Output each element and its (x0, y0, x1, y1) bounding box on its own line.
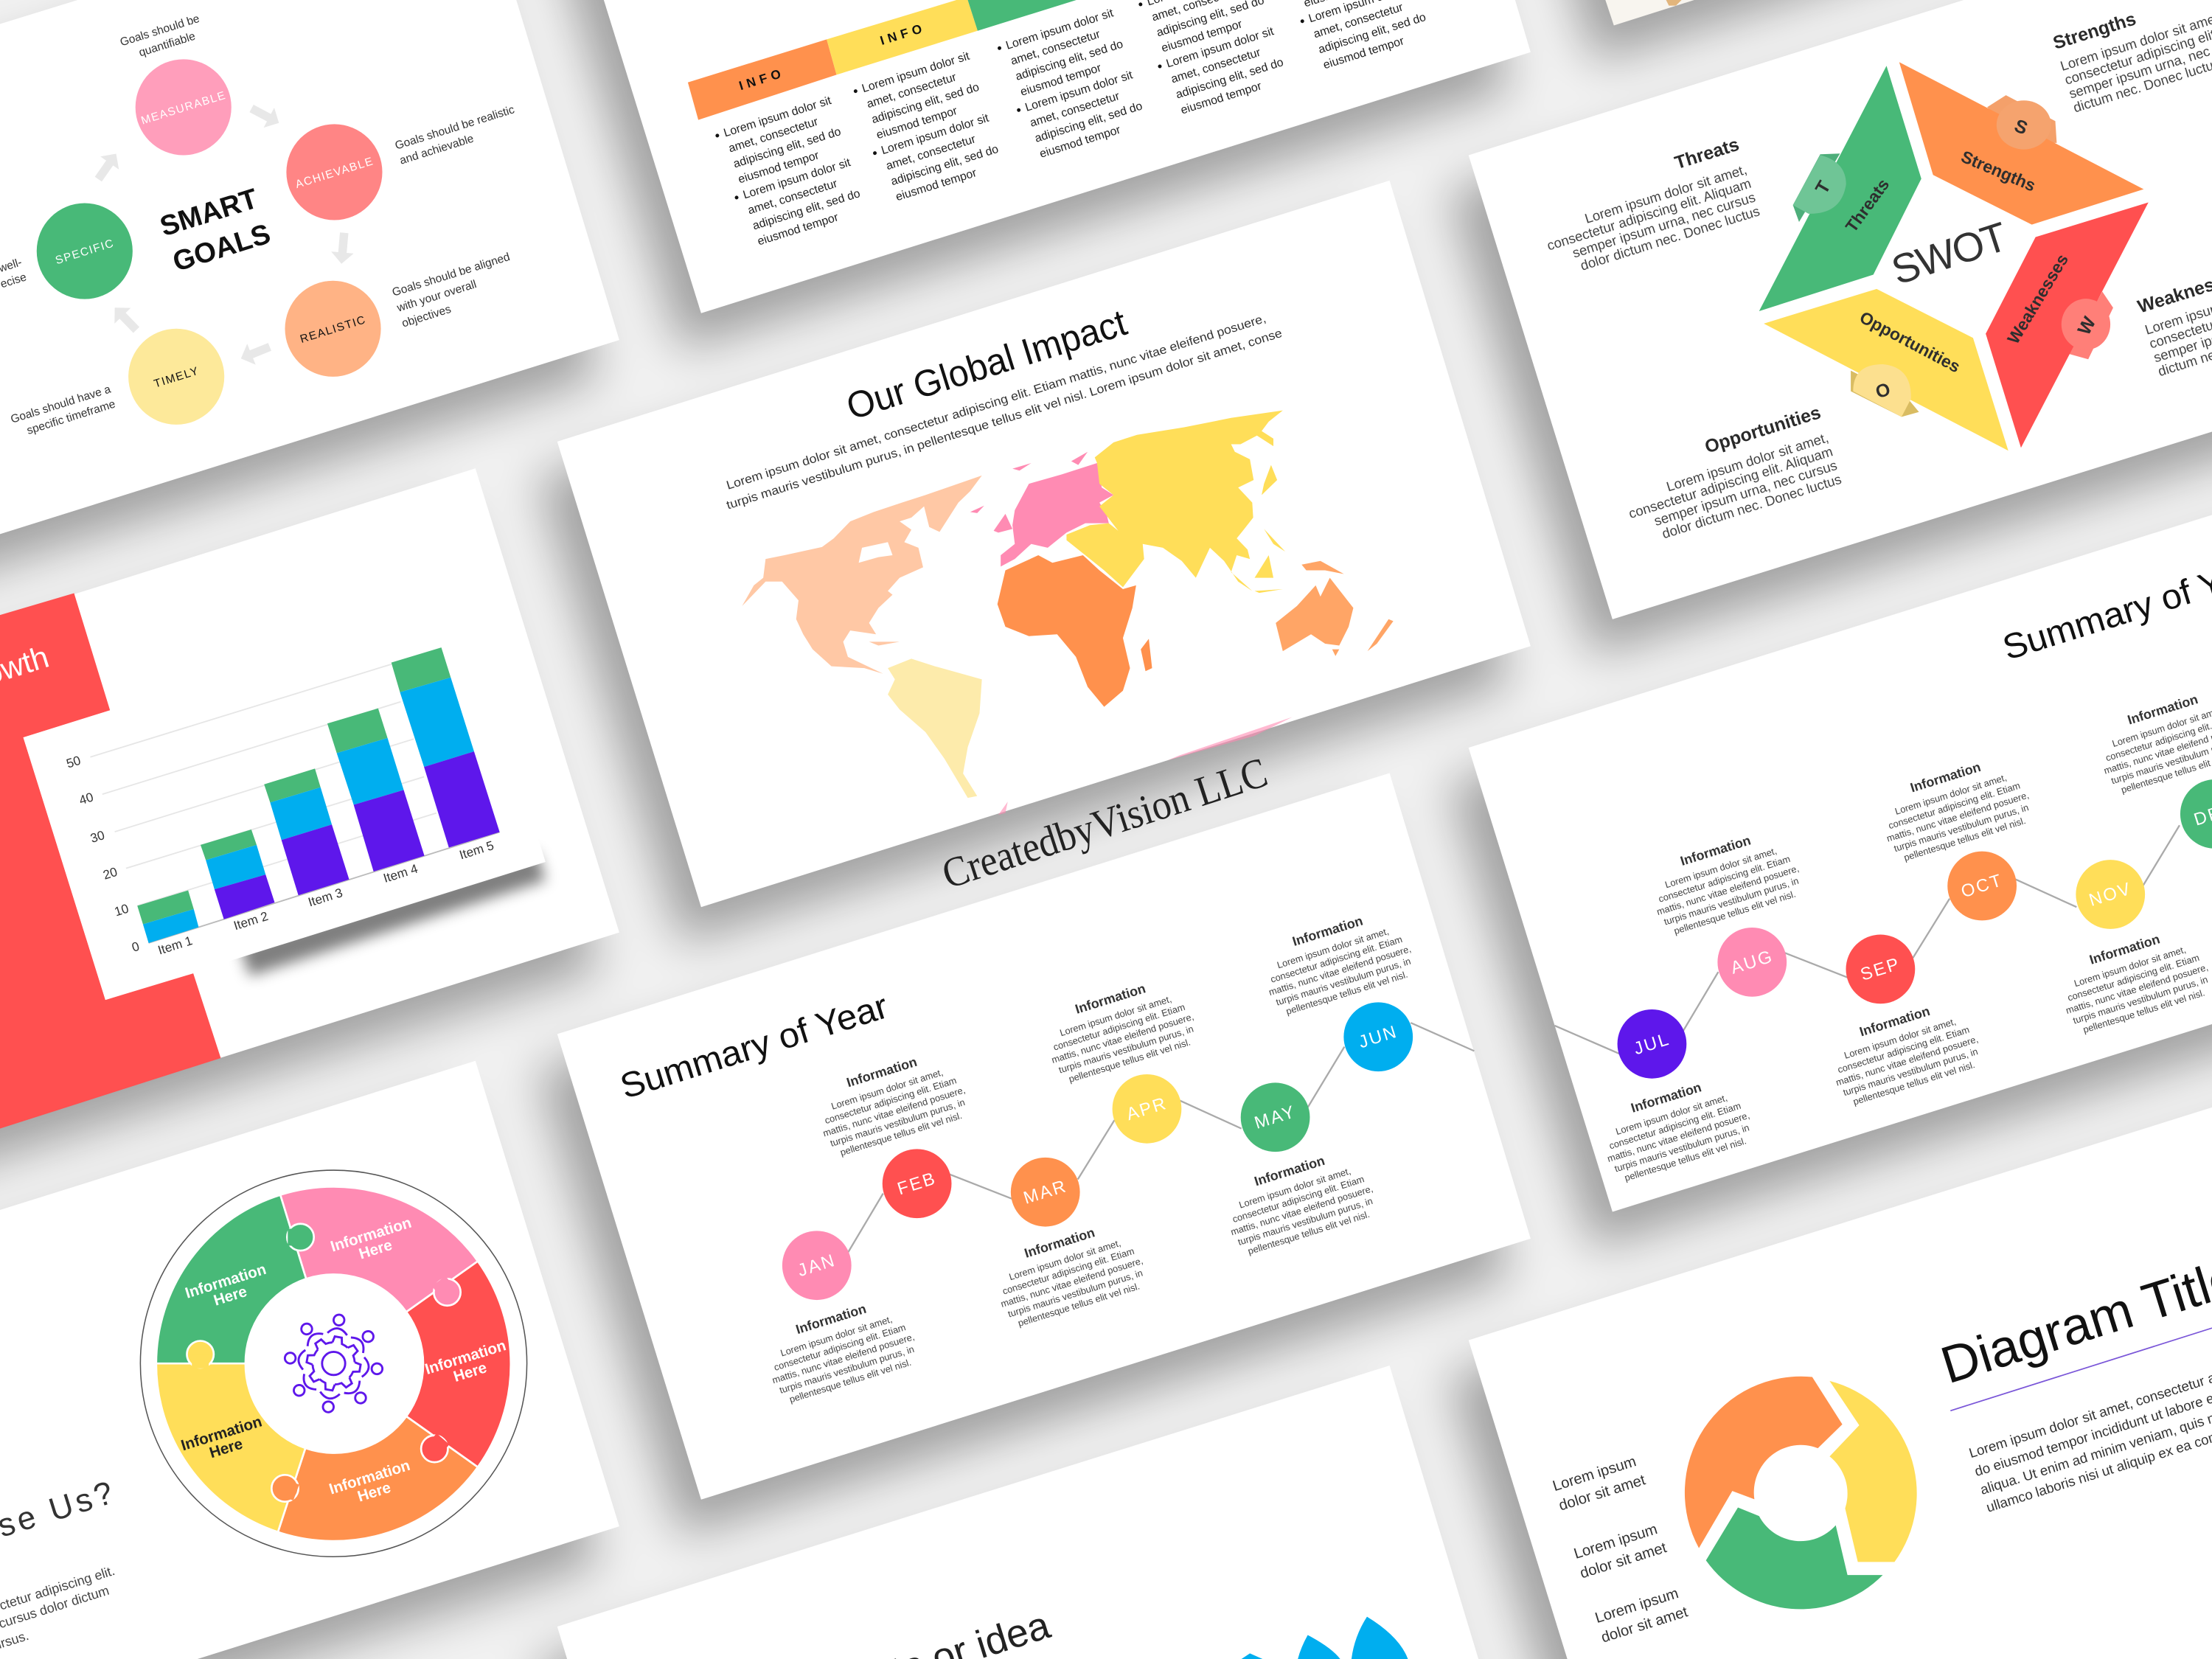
text: AUG info (1643, 821, 1807, 939)
text: MAY info: turpis mauris vestibulum purus, in (1237, 1195, 1374, 1248)
label: green segment: Information (183, 1261, 268, 1302)
axis labels: Item 1 (156, 933, 194, 958)
text: threats: Lorem ipsum dolor sit amet, (1583, 161, 1748, 226)
text: measurable note: quantifiable (137, 30, 197, 59)
node: AUG: AUG (1728, 946, 1776, 978)
label: yellow segment: Here (207, 1436, 245, 1461)
list column 3: eiusmod tempor (1038, 124, 1122, 161)
text: JUN info (1254, 902, 1419, 1020)
list column 2: adipiscing elit, sed do (870, 81, 981, 126)
segment labels (1812, 115, 2100, 403)
list column 2: eiusmod tempor (875, 105, 959, 142)
text: opportunities: semper ipsum urna, nec cursus (1652, 457, 1839, 529)
antarctica sliver (998, 717, 1293, 815)
label: red segment (423, 1337, 512, 1393)
text: cycle label 1: dolor sit amet (1557, 1472, 1648, 1514)
text: APR info: pellentesque tellus elit vel nisl. (1068, 1036, 1192, 1085)
list column 3: adipiscing elit, sed do (1033, 100, 1144, 145)
text: NOV info: turpis mauris vestibulum purus, in (2072, 974, 2209, 1026)
arrow: timely to specific (107, 300, 145, 338)
list column 2: amet, consectetur (885, 133, 978, 173)
text: JAN info: pellentesque tellus elit vel nisl. (788, 1357, 913, 1405)
SWOT diagram (1759, 62, 2149, 451)
node: JUN (1343, 1002, 1413, 1071)
text: realistic note: objectives (400, 303, 453, 330)
strengths segment (1899, 62, 2143, 225)
asia (1066, 411, 1285, 593)
text: OCT info: turpis mauris vestibulum purus, in (1893, 801, 2030, 854)
list column 5: eiusmod tempor (1322, 35, 1406, 72)
text: DEC info: Information (2126, 692, 2199, 728)
node: SEP (1846, 935, 1915, 1004)
text: threats (1532, 134, 1761, 281)
text: timely note: Goals should have a (9, 383, 113, 426)
text: JAN info: consectetur adipiscing elit. Etiam (773, 1321, 907, 1373)
list column 1: Lorem ipsum dolor sit (723, 94, 833, 139)
timeline connector (1554, 825, 2180, 1054)
text: NOV info: Information (2087, 931, 2162, 967)
list column 5: amet, consectetur (1312, 1, 1405, 41)
text: OCT info (1872, 748, 2037, 866)
text: strengths (2051, 0, 2212, 115)
text: JAN info: Information (794, 1301, 868, 1337)
text: measurable note: Goals should be (119, 13, 201, 49)
text: createdbyvision watermark: CreatedbyVision LLC (936, 749, 1273, 898)
axis labels: 30 (88, 827, 106, 846)
arrow: specific to measurable (89, 147, 125, 186)
list column 4: adipiscing elit, sed do (1175, 56, 1285, 102)
list column 2: adipiscing elit, sed do (889, 143, 1000, 188)
text: strengths: Strengths (2051, 8, 2138, 54)
label: red segment: Information (423, 1337, 508, 1378)
title: SMART goals (156, 182, 274, 279)
list column 3: Lorem ipsum dolor sit (1004, 7, 1116, 52)
puzzle ring diagram (140, 1170, 527, 1557)
text: MAR info (987, 1214, 1151, 1332)
node: APR: APR (1124, 1093, 1170, 1124)
threats segment (1759, 66, 1921, 311)
panel: summary of year slide (557, 773, 1531, 1500)
arrow: achievable to realistic (330, 232, 355, 265)
panel: diagram title slide (1469, 1107, 2212, 1659)
panel: why choose us slide (0, 1061, 619, 1659)
list column 2 (852, 50, 1005, 206)
node: JAN: JAN (796, 1251, 838, 1281)
text: SEP info: consectetur adipiscing elit. Etiam (1836, 1023, 1971, 1075)
text: SEP info: pellentesque tellus elit vel nisl. (1851, 1059, 1976, 1107)
table headers: INFO (878, 20, 928, 48)
text: map intro: Lorem ipsum dolor sit amet, consectetur adipiscing elit. Etiam mattis, nunc vitae eleifend posuere, (725, 312, 1267, 493)
title: our global impact: Our Global Impact (841, 301, 1132, 428)
text: MAR info: Information (1023, 1225, 1096, 1261)
list column 1: eiusmod tempor (756, 211, 841, 248)
icon: people around gear (284, 1313, 383, 1413)
text: OCT info: pellentesque tellus elit vel nisl. (1902, 815, 2027, 863)
text: cycle label 1 (1551, 1453, 1648, 1514)
text: JUL info: consectetur adipiscing elit. Etiam (1607, 1100, 1742, 1152)
node: JUN: JUN (1357, 1021, 1400, 1052)
timeline connector (848, 1023, 1474, 1253)
panel: global impact map slide (557, 181, 1531, 907)
text: SEP info: Lorem ipsum dolor sit amet, (1843, 1016, 1957, 1061)
list column 1: adipiscing elit, sed do (732, 125, 843, 170)
list column 3: Lorem ipsum dolor sit (1023, 69, 1135, 114)
title underline (1950, 1328, 2212, 1411)
text: SEP info: Information (1857, 1004, 1932, 1039)
text: JAN info: Lorem ipsum dolor sit amet, (779, 1313, 894, 1359)
segment labels: T (1812, 178, 1835, 198)
text: JAN info (758, 1290, 922, 1408)
text: JUN info: turpis mauris vestibulum purus, in (1275, 956, 1412, 1008)
panel: cream slide fragment (1605, 0, 1694, 25)
node: MAR (1011, 1158, 1080, 1227)
label: orange segment: Here (355, 1479, 393, 1506)
axis labels: 10 (113, 901, 131, 919)
cycle diagram (1685, 1377, 1917, 1609)
text: APR info: Lorem ipsum dolor sit amet, (1058, 993, 1173, 1038)
text: AUG info: consectetur adipiscing elit. Etiam (1657, 853, 1792, 905)
list column 2: Lorem ipsum dolor sit (860, 50, 972, 95)
list column 5: adipiscing elit, sed do (1317, 11, 1427, 56)
text: MAR info: pellentesque tellus elit vel nisl. (1017, 1280, 1141, 1329)
text: opportunities (1614, 402, 1843, 549)
text: JUN info: pellentesque tellus elit vel nisl. (1284, 969, 1409, 1017)
circle: realistic: REALISTIC (299, 313, 368, 346)
text: OCT info: Information (1908, 759, 1983, 795)
text: OCT info: Lorem ipsum dolor sit amet, (1893, 772, 2008, 817)
chart card (24, 599, 546, 1000)
panel: growth chart slide (0, 468, 619, 1129)
text: MAY info: Lorem ipsum dolor sit amet, (1237, 1165, 1352, 1211)
text: JUL info (1593, 1068, 1758, 1186)
text: JUL info: Information (1630, 1079, 1703, 1116)
title: SWOT: SWOT (1886, 213, 2013, 293)
text: realistic note (390, 251, 521, 330)
label: orange segment: Information (327, 1457, 412, 1498)
text: MAY info: pellentesque tellus elit vel nisl. (1246, 1208, 1371, 1256)
node: FEB: FEB (895, 1168, 939, 1199)
text: cycle label 3 (1593, 1585, 1690, 1646)
axis labels: 40 (77, 790, 95, 807)
text: APR info: mattis, nunc vitae eleifend posuere, (1050, 1011, 1195, 1065)
text: FEB info: Information (845, 1054, 919, 1090)
list column 1: adipiscing elit, sed do (751, 187, 862, 232)
text: MAY info (1217, 1142, 1381, 1260)
list column 4: eiusmod tempor (1179, 80, 1264, 117)
arrow: realistic to timely (237, 336, 274, 369)
label: pink segment: Information (329, 1214, 414, 1255)
text: SEP info: turpis mauris vestibulum purus, in (1842, 1046, 1979, 1098)
list column 5 (1289, 0, 1433, 74)
circle: specific: SPECIFIC (54, 237, 116, 267)
node: MAR: MAR (1021, 1176, 1070, 1208)
node: NOV: NOV (2087, 878, 2135, 911)
text: JUL info: turpis mauris vestibulum purus, in (1613, 1122, 1750, 1175)
text: opportunities: Opportunities (1703, 402, 1823, 458)
table headers (688, 0, 1077, 120)
segment labels: S (2011, 115, 2031, 139)
title: summary of year: Summary of Year (616, 987, 893, 1107)
panel: product idea slide (557, 1366, 1478, 1659)
node: JUL (1618, 1009, 1686, 1079)
segment labels: Weaknesses (2003, 251, 2072, 347)
list column 2: Lorem ipsum dolor sit (880, 112, 991, 157)
icon: blue drops (1242, 1617, 1408, 1659)
weaknesses segment (1986, 203, 2149, 448)
text: timely note: specific timeframe (25, 398, 117, 437)
node: FEB (883, 1149, 951, 1218)
node: OCT (1947, 852, 2017, 920)
south america (888, 658, 982, 798)
text: threats: Threats (1672, 134, 1742, 173)
segment labels: Opportunities (1857, 307, 1964, 376)
label: yellow segment: Information (179, 1413, 264, 1454)
list column 3: amet, consectetur (1029, 90, 1121, 130)
text: FEB info (809, 1043, 973, 1161)
axis labels: Item 4 (381, 861, 420, 886)
text: opportunities: dolor dictum nec. Donec luctus (1660, 471, 1843, 541)
text: JUL info: pellentesque tellus elit vel nisl. (1623, 1135, 1747, 1183)
text: APR info: Information (1074, 981, 1147, 1017)
text: MAY info: mattis, nunc vitae eleifend posuere, (1229, 1183, 1374, 1237)
circle: timely: TIMELY (153, 364, 201, 391)
text: FEB info: turpis mauris vestibulum purus, in (829, 1096, 966, 1149)
node: APR (1113, 1074, 1181, 1144)
list column 3: amet, consectetur (1009, 28, 1102, 68)
list column 1: Lorem ipsum dolor sit (742, 156, 852, 201)
text: NOV info (2051, 920, 2212, 1038)
oceania (1276, 561, 1394, 656)
panel: summary of year slide part two (1469, 515, 2212, 1211)
text: measurable note (119, 13, 206, 63)
text: JAN info: turpis mauris vestibulum purus, in (778, 1343, 916, 1396)
list column 4: amet, consectetur (1169, 46, 1262, 86)
circle: measurable: MEASURABLE (139, 89, 228, 128)
text: APR info (1037, 970, 1202, 1088)
title: SMART goals: GOALS (169, 218, 274, 278)
node: OCT: OCT (1959, 870, 2006, 902)
list column 4: eiusmod tempor (1160, 18, 1245, 55)
label: red segment: Here (451, 1359, 489, 1385)
text: FEB info: consectetur adipiscing elit. Etiam (824, 1074, 958, 1126)
list column 1: eiusmod tempor (737, 149, 821, 186)
list column 3: eiusmod tempor (1019, 62, 1103, 99)
circle: achievable: ACHIEVABLE (294, 155, 375, 191)
text: NOV info: Lorem ipsum dolor sit amet, (2073, 944, 2187, 989)
table headers: INFO (737, 65, 787, 93)
text: JUL info: mattis, nunc vitae eleifend posuere, (1606, 1110, 1751, 1164)
axis labels: 0 (130, 939, 141, 955)
text: NOV info: consectetur adipiscing elit. Etiam (2066, 952, 2201, 1004)
text: SEP info: mattis, nunc vitae eleifend posuere, (1834, 1033, 1980, 1088)
card shadow (240, 852, 546, 976)
label: green segment (183, 1261, 273, 1317)
panel: SMART goals slide (0, 0, 619, 534)
text: cycle label 2: dolor sit amet (1578, 1540, 1669, 1582)
text: NOV info: mattis, nunc vitae eleifend posuere, (2065, 961, 2209, 1016)
list column 2: eiusmod tempor (894, 167, 978, 204)
arrow: measurable to achievable (246, 98, 284, 133)
label: orange segment (327, 1457, 417, 1513)
label: pink segment (329, 1214, 418, 1270)
axis labels: Item 2 (232, 908, 270, 933)
text: threats: semper ipsum urna, nec cursus (1571, 189, 1757, 261)
title: SMART goals: SMART (156, 183, 262, 243)
text: opportunities: Lorem ipsum dolor sit amet, (1665, 429, 1830, 495)
text: MAR info: mattis, nunc vitae eleifend posuere, (999, 1255, 1144, 1310)
node: JAN (782, 1231, 852, 1300)
text: FEB info: Lorem ipsum dolor sit amet, (830, 1066, 945, 1112)
text: MAY info: Information (1253, 1153, 1326, 1189)
circle: achievable (286, 124, 382, 220)
circle: realistic (285, 281, 381, 377)
text: APR info: consectetur adipiscing elit. Etiam (1052, 1001, 1186, 1053)
text: FEB info: mattis, nunc vitae eleifend posuere, (821, 1084, 967, 1138)
label: green segment: Here (212, 1283, 249, 1310)
text: AUG info: Information (1679, 832, 1753, 869)
red side block (0, 594, 220, 1129)
europe (970, 452, 1113, 566)
node: DEC (2180, 779, 2212, 849)
text: achievable note: and achievable (398, 133, 476, 167)
node: AUG (1717, 928, 1787, 997)
segment labels: W (2073, 313, 2100, 338)
segment labels: O (1873, 379, 1893, 403)
text: AUG info: pellentesque tellus elit vel nisl. (1672, 888, 1797, 936)
text: cycle label 2: Lorem ipsum (1572, 1521, 1659, 1562)
segment labels: Threats (1842, 175, 1893, 236)
text: cycle label 3: dolor sit amet (1599, 1604, 1690, 1646)
opportunities segment (1764, 289, 2008, 451)
list column 2: amet, consectetur (866, 71, 959, 111)
node: JUL: JUL (1632, 1029, 1672, 1059)
list column 3 (996, 7, 1150, 163)
axis labels: Item 3 (306, 885, 344, 910)
axis labels: 50 (65, 753, 83, 771)
list column 3: adipiscing elit, sed do (1014, 38, 1124, 83)
axis labels: 20 (101, 864, 119, 883)
text: DEC info (2090, 681, 2212, 799)
text: cycle label 1: Lorem ipsum (1551, 1453, 1638, 1495)
axis labels (65, 753, 495, 958)
text: JAN info: mattis, nunc vitae eleifend posuere, (771, 1331, 916, 1385)
axis labels: Item 5 (457, 838, 495, 862)
node: NOV (2076, 860, 2145, 929)
text: weaknesses (2135, 234, 2212, 379)
circle: specific (37, 204, 133, 299)
text: realistic note: Goals should be aligned (391, 251, 512, 299)
text: MAR info: consectetur adipiscing elit. Etiam (1001, 1245, 1135, 1297)
text: APR info: turpis mauris vestibulum purus, in (1057, 1023, 1194, 1076)
text: opportunities: consectetur adipiscing elit. Aliquam (1627, 443, 1834, 521)
list column 1 (714, 94, 867, 251)
world map (742, 411, 1394, 815)
label: yellow segment (179, 1413, 268, 1469)
text: OCT info: mattis, nunc vitae eleifend posuere, (1885, 789, 2030, 844)
text: SEP info (1822, 992, 1986, 1110)
circle: timely (128, 329, 224, 425)
label: pink segment: Here (357, 1237, 394, 1263)
circle: measurable (136, 59, 232, 155)
panel: info table slide (604, 0, 1531, 313)
text: cycle label 2 (1572, 1520, 1669, 1582)
north america (742, 476, 982, 674)
node: SEP: SEP (1858, 953, 1903, 985)
text: MAR info: Lorem ipsum dolor sit amet, (1008, 1237, 1122, 1282)
list column 4: Lorem ipsum dolor sit (1165, 25, 1276, 71)
list column 1: amet, consectetur (746, 177, 839, 217)
text: FEB info: pellentesque tellus elit vel nisl. (839, 1110, 963, 1158)
text: diagram paragraph (1967, 1338, 2212, 1515)
text: JUN info: Lorem ipsum dolor sit amet, (1276, 925, 1390, 970)
text: NOV info: pellentesque tellus elit vel nisl. (2081, 987, 2206, 1035)
africa (998, 555, 1152, 707)
text: JUN info: Information (1290, 914, 1365, 949)
text: AUG info: mattis, nunc vitae eleifend posuere, (1655, 863, 1801, 917)
text: MAR info: turpis mauris vestibulum purus, in (1006, 1267, 1144, 1320)
text: achievable note: Goals should be realistic (394, 103, 516, 153)
text: AUG info: turpis mauris vestibulum purus, in (1663, 875, 1800, 928)
node: MAY: MAY (1252, 1102, 1298, 1133)
text: JUN info: consectetur adipiscing elit. Etiam (1269, 933, 1404, 985)
segment labels: Strengths (1958, 147, 2039, 195)
text: threats: dolor dictum nec. Donec luctus (1579, 203, 1761, 274)
text: threats: consectetur adipiscing elit. Aliquam (1545, 175, 1753, 254)
text: JUN info: mattis, nunc vitae eleifend posuere, (1267, 943, 1412, 998)
list column 4 (1137, 0, 1290, 119)
text: AUG info: Lorem ipsum dolor sit amet, (1663, 845, 1778, 890)
text: OCT info: consectetur adipiscing elit. Etiam (1887, 779, 2022, 831)
text: cycle label 3: Lorem ipsum (1593, 1585, 1680, 1627)
node: MAY (1241, 1082, 1310, 1152)
list column 1: amet, consectetur (727, 115, 820, 155)
text: MAY info: consectetur adipiscing elit. Etiam (1231, 1173, 1366, 1225)
text: realistic note: with your overall (395, 278, 478, 315)
text: map intro: turpis mauris vestibulum purus, in pellentesque tellus elit vel nisl. Lorem ipsum dolor sit amet, conse (725, 327, 1284, 512)
panel: SWOT slide (1469, 0, 2212, 619)
stacked bar chart (90, 647, 500, 943)
text: JUL info: Lorem ipsum dolor sit amet, (1614, 1092, 1728, 1137)
